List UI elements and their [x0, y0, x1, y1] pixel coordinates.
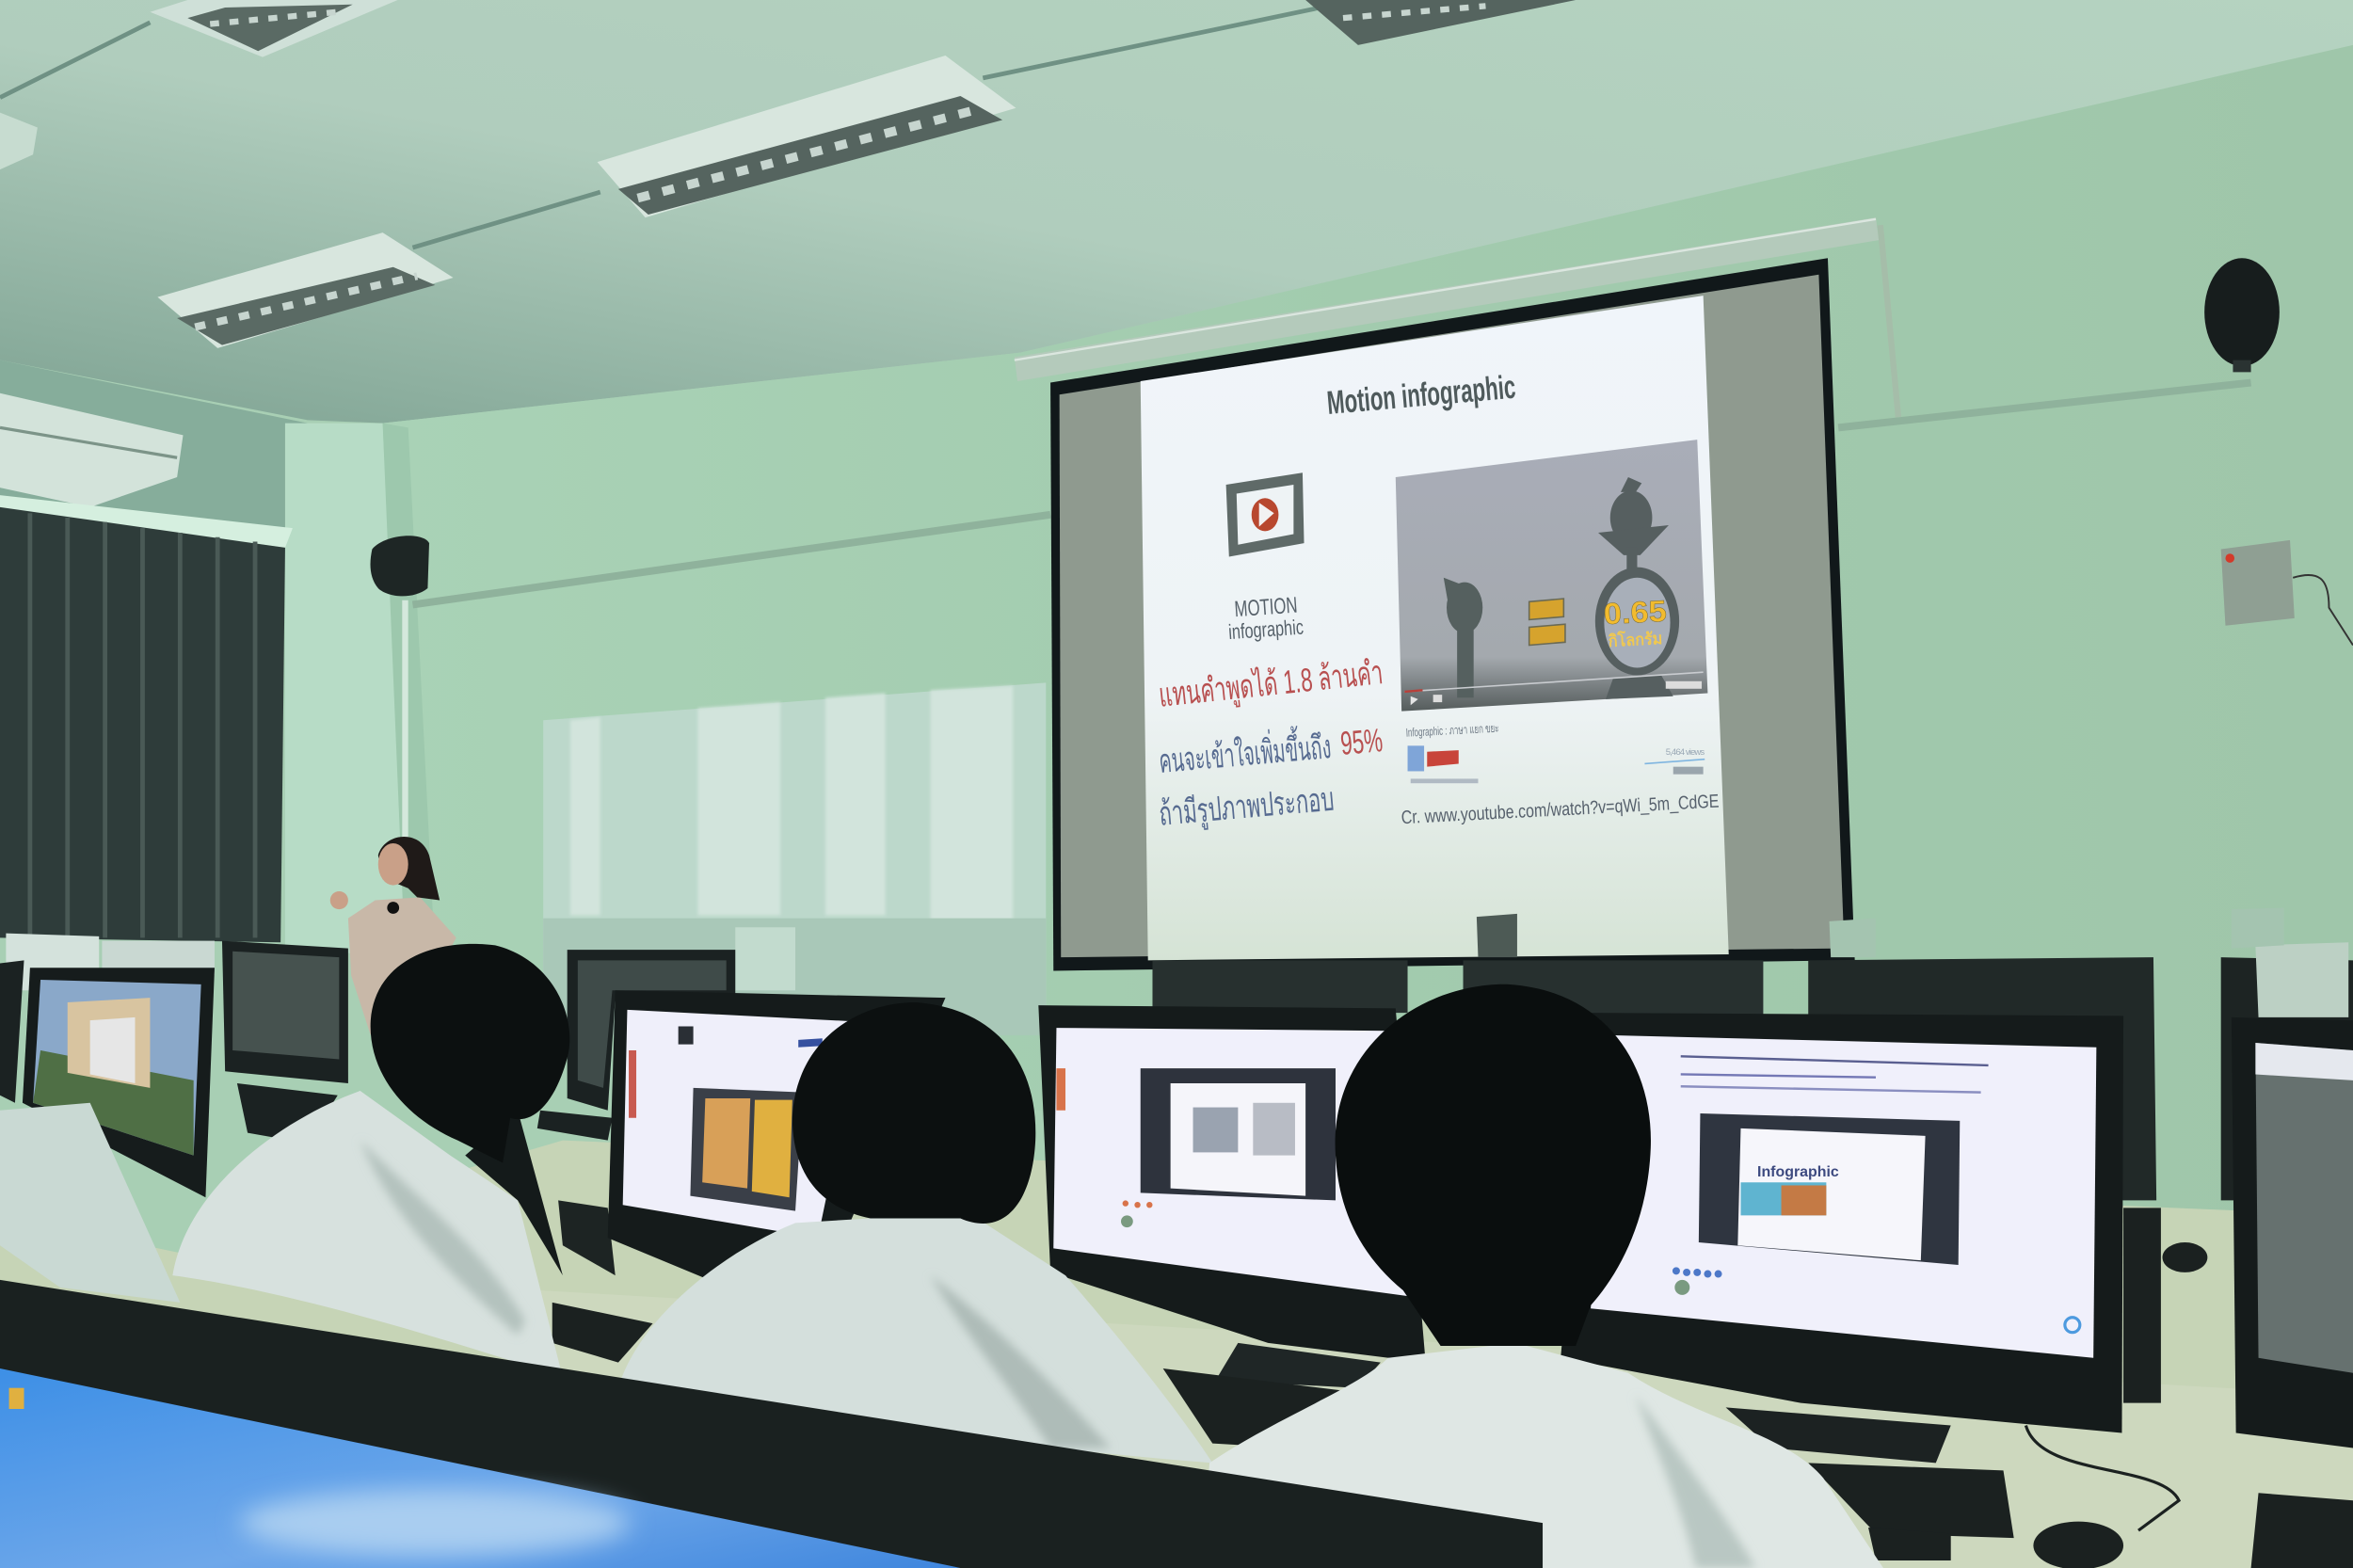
icon: play video	[1226, 472, 1305, 556]
slide text: Thai statements: 95%	[1339, 722, 1385, 762]
video metadata: Infographic : ภาษา แยก ขยะ	[1405, 721, 1499, 740]
weight value: 0.65	[1603, 594, 1668, 631]
back row monitors	[6, 908, 2353, 1275]
student middle	[618, 1002, 1212, 1463]
whiteboard	[543, 682, 1046, 1035]
figure	[1444, 578, 1482, 697]
student right	[1201, 984, 1883, 1568]
video still: กิโลกรัม	[1608, 628, 1663, 650]
screen right support	[1881, 225, 1898, 417]
wall box	[2221, 540, 2353, 646]
left speaker	[371, 536, 429, 596]
foreground monitor	[0, 1280, 1543, 1568]
slide text: Thai statements: ถ้ามีรูปภาพประกอบ	[1158, 781, 1336, 834]
far-left monitor	[0, 960, 215, 1197]
slide text: Thai statements: คนจะเข้าใจเพิ่มขึ้นถึง	[1157, 722, 1333, 780]
book cover	[1740, 1164, 1839, 1215]
middle monitor	[1038, 1005, 1426, 1388]
motion label: MOTION	[1234, 593, 1298, 622]
slide text: Thai statements	[1157, 653, 1385, 834]
video metadata	[1405, 721, 1705, 783]
wall speaker	[2204, 258, 2280, 372]
video still	[1396, 440, 1707, 712]
window blinds	[0, 495, 293, 942]
keyboards and mice	[552, 1208, 2353, 1568]
right-center monitor	[1561, 1013, 2123, 1463]
slide	[1141, 296, 1729, 960]
projector screen	[1050, 258, 1855, 970]
air conditioner	[0, 393, 184, 507]
motion label: infographic	[1227, 616, 1305, 644]
right monitor	[2232, 1017, 2353, 1448]
desks	[0, 1141, 2353, 1568]
equals sign	[1529, 599, 1565, 646]
ceiling lights	[0, 0, 1576, 348]
student left	[172, 944, 569, 1378]
book cover: Infographic	[1757, 1164, 1839, 1180]
video credit: Cr. www.youtube.com/watch?v=qWi_5m_CdGE	[1401, 792, 1720, 828]
left-center monitor	[608, 990, 945, 1278]
video controls	[1404, 672, 1704, 705]
scale with bag	[1595, 477, 1679, 699]
video metadata: 5,464 views	[1666, 747, 1705, 758]
motion label	[1227, 593, 1305, 644]
presenter	[330, 837, 456, 1035]
cable	[2025, 1426, 2179, 1530]
paper sheet	[0, 1103, 180, 1303]
projector shadow tab	[1477, 914, 1517, 957]
slide title: Motion infographic	[1325, 369, 1517, 422]
projector screen housing	[1015, 217, 1879, 381]
slide text: Thai statements: แทนคำพูดได้ 1.8 ล้านคำ	[1157, 653, 1385, 715]
